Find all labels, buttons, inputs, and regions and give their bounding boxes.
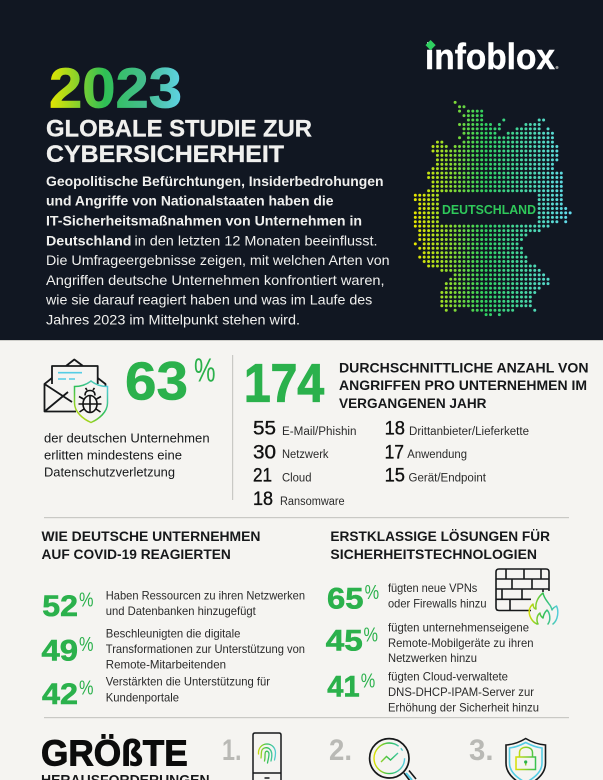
challenge 1 number: 1.: [222, 734, 242, 767]
stat: 45 percent: Netzwerken hinzu: [388, 651, 477, 665]
intro text block: IT-Sicherheitsmaßnahmen von Unternehmen in: [46, 213, 362, 229]
stat: 52 percent: und Datenbanken hinzugefügt: [106, 604, 256, 618]
attack breakdown list: Anwendung: [407, 449, 467, 461]
stat: 45 percent: %: [364, 624, 378, 646]
challenges heading: GRÖßTE: [41, 733, 188, 774]
intro text block: Angriffen deutsche Unternehmen konfrontiert waren,: [46, 272, 385, 288]
stat description: der deutschen Unternehmen: [44, 431, 210, 446]
attacks heading: [339, 360, 588, 411]
stat: 41 percent: 41: [327, 671, 360, 704]
attack breakdown list: E-Mail/Phishin: [282, 426, 356, 438]
intro text block: in den letzten 12 Monaten beeinflusst.: [134, 232, 378, 248]
stat: 49 percent: Remote-Mitarbeitenden: [106, 657, 226, 671]
attack breakdown list: [253, 419, 529, 510]
year heading: 2023: [49, 56, 182, 120]
icon: phone with fingerprint: [253, 733, 281, 780]
stat description: erlitten mindestens eine: [44, 447, 182, 462]
intro text block: Die Umfrageergebnisse zeigen, mit welchen Arten von: [46, 252, 390, 268]
stat: 42 percent: [42, 675, 270, 711]
covid heading: WIE DEUTSCHE UNTERNEHMEN: [42, 529, 260, 544]
attack breakdown list: 55: [253, 419, 276, 440]
stat: 41 percent: Erhöhung der Sicherheit hinzu: [388, 700, 539, 714]
attack breakdown list: Drittanbieter/Lieferkette: [409, 426, 529, 438]
stat: 42 percent: Kundenportale: [106, 690, 179, 704]
stat: 49 percent: 49: [42, 634, 78, 667]
intro text block: [45, 173, 390, 327]
title: [46, 116, 312, 168]
attack breakdown list: 18: [253, 489, 273, 510]
panel: biggest challenges: [41, 733, 546, 780]
stat: 45 percent: 45: [326, 625, 363, 658]
stat: 65 percent: %: [365, 582, 379, 604]
attack breakdown list: Gerät/Endpoint: [408, 472, 487, 484]
stat: 65 percent: 65: [327, 582, 364, 615]
stat: 52 percent: [42, 589, 305, 623]
intro text block: Jahres 2023 im Mittelpunkt stehen wird.: [46, 311, 300, 327]
technology heading: [330, 529, 550, 562]
stat: 65 percent: fügten neue VPNs: [388, 581, 477, 595]
icon: envelope with bug shield: [44, 360, 108, 422]
stat: 49 percent: Transformationen zur Unterstützung von: [106, 642, 305, 656]
attacks heading: ANGRIFFEN PRO UNTERNEHMEN IM: [339, 378, 587, 393]
panel: covid response: [42, 529, 305, 711]
attack breakdown list: 30: [253, 442, 276, 463]
intro text block: und Angriffe von Nationalstaaten haben die: [46, 193, 334, 209]
technology heading: SICHERHEITSTECHNOLOGIEN: [330, 547, 537, 562]
challenge 3 number: 3.: [469, 734, 494, 767]
attacks heading: VERGANGENEN JAHR: [339, 396, 487, 411]
stat: 42 percent: 42: [42, 678, 78, 711]
panel: security technology: [326, 529, 558, 714]
attack breakdown list: 17: [385, 442, 404, 463]
intro text block: Deutschland: [46, 232, 132, 248]
stat: 49 percent: Beschleunigten die digitale: [106, 627, 241, 641]
stat: 45 percent: [326, 621, 534, 665]
stat: 65 percent: oder Firewalls hinzu: [388, 596, 486, 610]
stat: 52 percent: Haben Ressourcen zu ihren Netzwerken: [106, 589, 305, 603]
challenge 2 number: 2.: [329, 734, 352, 767]
stat: 63 percent: %: [194, 352, 216, 388]
stat: 42 percent: %: [79, 678, 94, 700]
stat: 52 percent: 52: [42, 590, 78, 623]
attack breakdown list: Netzwerk: [282, 449, 329, 461]
logo: infoblox: infoblox: [425, 36, 555, 77]
title: GLOBALE STUDIE ZUR: [46, 116, 312, 143]
title: CYBERSICHERHEIT: [46, 141, 284, 168]
icon: firewall with flame: [496, 569, 558, 624]
panel: header: [0, 0, 603, 340]
attack breakdown list: 18: [385, 419, 405, 440]
covid heading: [42, 529, 260, 562]
stat description: [44, 431, 210, 479]
attack breakdown list: Cloud: [282, 472, 312, 484]
icon: shield with lock: [506, 738, 546, 780]
covid heading: AUF COVID-19 REAGIERTEN: [42, 547, 231, 562]
stat: 63 percent: 63: [125, 351, 188, 411]
technology heading: ERSTKLASSIGE LÖSUNGEN FÜR: [330, 529, 550, 544]
attack breakdown list: 21: [253, 466, 272, 487]
attacks heading: DURCHSCHNITTLICHE ANZAHL VON: [339, 360, 588, 375]
attack breakdown list: Ransomware: [280, 496, 345, 508]
stat: 41 percent: [327, 670, 539, 714]
panel: average attacks: [244, 354, 588, 510]
stat: 42 percent: Verstärkten die Unterstützung für: [106, 675, 270, 689]
map label: DEUTSCHLAND: [442, 202, 536, 217]
stat: 45 percent: Remote-Mobilgeräte zu ihren: [388, 636, 534, 650]
stat: 45 percent: fügten unternehmenseigene: [388, 621, 529, 635]
stat description: Datenschutzverletzung: [44, 464, 175, 479]
dotted map: Germany: [415, 102, 570, 315]
icon: magnifier with chart: [370, 739, 416, 780]
stat: 41 percent: fügten Cloud-verwaltete: [388, 670, 508, 684]
stat: 41 percent: %: [361, 670, 375, 692]
stat: 49 percent: [42, 627, 305, 671]
panel: light background: [0, 340, 603, 780]
stat: 174: 174: [244, 354, 324, 414]
intro text block: wie sie darauf reagiert haben und was im Laufe des: [45, 292, 372, 308]
stat: 49 percent: %: [79, 634, 94, 656]
intro text block: Geopolitische Befürchtungen, Insiderbedrohungen: [46, 173, 384, 189]
stat: 52 percent: %: [79, 590, 94, 612]
panel: data breach stat: [44, 351, 216, 479]
stat: 63 percent: [125, 351, 216, 411]
attack breakdown list: 15: [385, 466, 405, 487]
stat: 41 percent: DNS-DHCP-IPAM-Server zur: [388, 685, 534, 699]
stat: 65 percent: [327, 581, 486, 615]
top edge line: [0, 340, 603, 341]
